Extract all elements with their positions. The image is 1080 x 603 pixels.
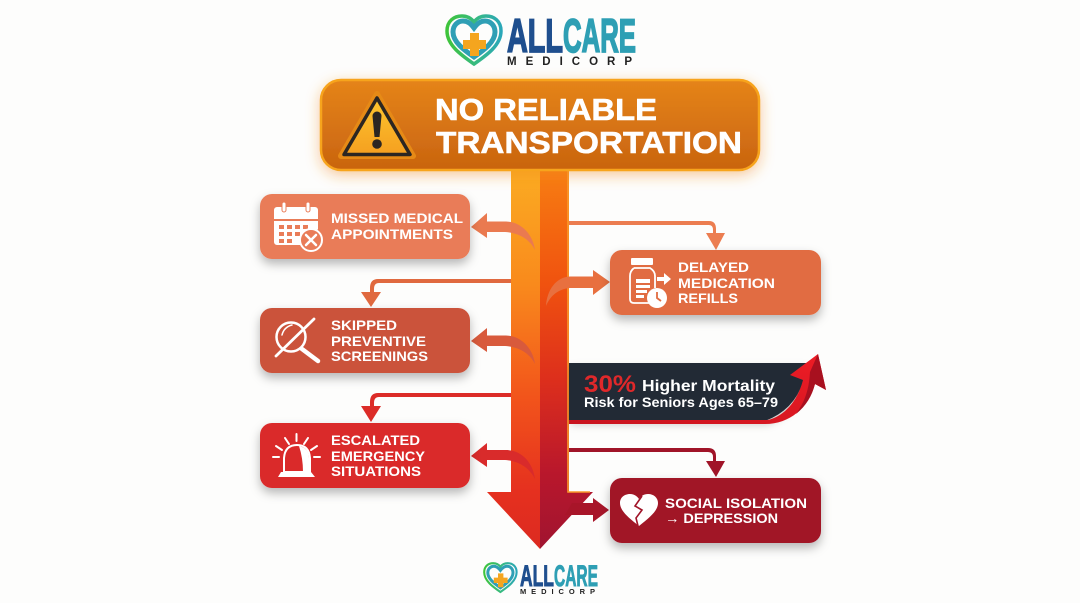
connector: to escalated emergency side arrow: [471, 443, 535, 479]
label text: MEDICATION: [678, 275, 775, 291]
stat text: Risk for Seniors Ages 65–79: [584, 395, 778, 410]
label text: REFILLS: [678, 290, 738, 306]
panel: delayed medication refills: [610, 250, 821, 315]
label text: → DEPRESSION: [665, 510, 778, 526]
label text: SCREENINGS: [331, 348, 428, 364]
label text: EMERGENCY: [331, 448, 426, 464]
label text: SOCIAL ISOLATION: [665, 495, 807, 511]
label text: SITUATIONS: [331, 463, 421, 479]
label text: [331, 210, 463, 242]
icon: calendar with x: [274, 202, 322, 251]
label text: APPOINTMENTS: [331, 226, 453, 242]
bottom logo: [484, 560, 598, 596]
connector: social isolation side arrow: [565, 498, 609, 522]
label text: [678, 259, 775, 306]
panel: skipped preventive screenings: [260, 308, 470, 373]
connector: to delayed refills: [569, 221, 725, 250]
connector: refill arrow: [546, 270, 610, 306]
stat text: [584, 371, 778, 410]
label text: PREVENTIVE: [331, 333, 426, 349]
connector: to skipped screenings: [361, 279, 511, 307]
bottom logo: MEDICORP: [520, 587, 595, 596]
icon: emergency siren: [273, 434, 320, 477]
label text: [665, 495, 807, 526]
panel: social isolation to depression: [610, 478, 821, 543]
logo heart icon small: [484, 563, 517, 592]
logo heart icon: [447, 16, 501, 64]
connector: to escalated emergency: [361, 393, 511, 422]
stat text: Higher Mortality: [642, 378, 775, 395]
label text: [331, 432, 426, 479]
icon: broken heart: [620, 494, 658, 526]
logo wordmark: ALL: [507, 9, 563, 62]
top logo: MEDICORP: [507, 56, 632, 68]
panel: escalated emergency situations: [260, 423, 470, 488]
label text: MISSED MEDICAL: [331, 210, 463, 226]
banner title: [435, 93, 742, 160]
label text: DELAYED: [678, 259, 749, 275]
icon: warning triangle: [341, 94, 413, 156]
label text: ESCALATED: [331, 432, 420, 448]
banner title: NO RELIABLE: [435, 93, 657, 127]
connector: to skipped screenings side arrow: [471, 328, 535, 364]
banner: no reliable transportation: [321, 80, 759, 170]
main downward arrow: [487, 171, 593, 549]
red underline and rising arrow: [569, 354, 826, 424]
logo wordmark small: ALL: [520, 560, 554, 593]
label text: SKIPPED: [331, 317, 397, 333]
banner title: TRANSPORTATION: [436, 126, 742, 160]
icon: pill bottle with clock: [630, 258, 671, 308]
top logo: [447, 9, 636, 68]
stat callout: 30% higher mortality: [569, 354, 826, 424]
label text: [331, 317, 428, 364]
panel: missed medical appointments: [260, 194, 470, 259]
icon: crossed magnifier: [276, 319, 318, 361]
stat text: 30%: [584, 371, 636, 398]
connector: to missed appointments: [471, 213, 535, 250]
bottom logo: CARE: [554, 560, 598, 593]
connector: to social isolation: [569, 448, 725, 477]
top logo: CARE: [563, 9, 636, 62]
